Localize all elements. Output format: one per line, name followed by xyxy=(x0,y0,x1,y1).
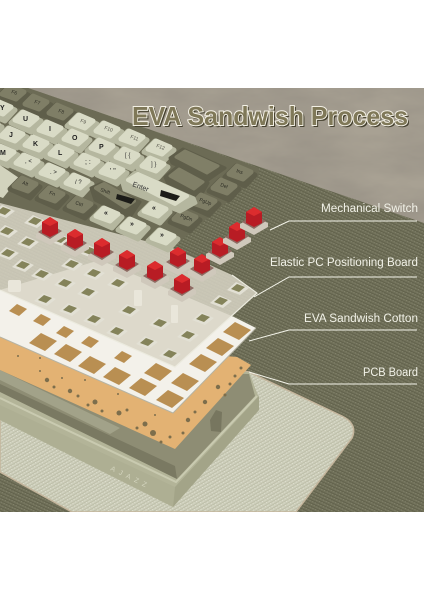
function row: F12 xyxy=(155,143,166,152)
case screw post xyxy=(210,410,222,432)
function row: F9 xyxy=(79,118,87,126)
bottom row: « xyxy=(152,205,156,212)
shift key: Shift xyxy=(99,187,111,197)
callout: elastic PC positioning board xyxy=(254,257,418,297)
function row: F11 xyxy=(129,134,139,143)
shift key xyxy=(91,183,140,217)
letter row Y to bracket: I xyxy=(49,126,51,133)
bottom row: Ctrl xyxy=(74,200,84,209)
brand mark: AJAZZ xyxy=(109,466,152,491)
callout: EVA sandwish cotton: EVA Sandwish Cotton xyxy=(304,313,418,325)
mechanical switches xyxy=(36,207,268,302)
letter row Y to bracket xyxy=(0,101,168,178)
letter row M to slash xyxy=(0,146,92,195)
letter row J to quote: ' " xyxy=(110,168,116,175)
function row: F8 xyxy=(57,108,65,116)
function row: F6 xyxy=(10,89,18,97)
stabilizers xyxy=(8,280,178,323)
letter row M to slash: , < xyxy=(25,159,32,165)
letter row Y to bracket: U xyxy=(23,116,28,123)
letter row Y to bracket: P xyxy=(99,144,104,151)
navigation cluster: PgUp xyxy=(198,197,212,207)
light cloth pad xyxy=(0,370,354,512)
elastic PC positioning board xyxy=(0,203,258,368)
enter key: Enter xyxy=(131,181,150,194)
PCB board xyxy=(0,335,251,449)
callout: EVA sandwish cotton xyxy=(249,313,418,341)
letter row Y to bracket: Y xyxy=(0,105,5,112)
desk mat xyxy=(0,88,424,512)
letter row J to quote: K xyxy=(33,141,38,148)
title: EVA Sandwish Process xyxy=(132,101,408,131)
title: EVA Sandwish Process xyxy=(134,102,410,132)
letter row J to quote: L xyxy=(58,150,63,157)
bottom row: Fn xyxy=(48,190,56,198)
callout: elastic PC positioning board: Elastic PC Positioning Board xyxy=(270,257,418,269)
function row: F10 xyxy=(103,125,114,134)
letter row Y to bracket: [ { xyxy=(125,153,130,159)
navigation cluster: PgDn xyxy=(179,213,193,223)
keycap layer xyxy=(0,86,259,250)
letter row J to quote xyxy=(0,118,127,184)
letter row M to slash: / ? xyxy=(75,180,82,186)
letter row J to quote: J xyxy=(9,132,13,139)
letter row Y to bracket: O xyxy=(72,135,78,142)
callout: PCB board xyxy=(249,367,418,384)
navigation cluster xyxy=(165,149,255,231)
photo scene xyxy=(0,86,424,512)
bottom row xyxy=(0,165,178,250)
bottom row: » xyxy=(130,221,134,228)
letter row J to quote: ; : xyxy=(85,159,91,166)
function row xyxy=(0,86,174,161)
navigation cluster: Del xyxy=(219,182,228,190)
callout: mechanical switch xyxy=(270,203,418,230)
letter row M to slash: . > xyxy=(50,170,57,176)
letter row M to slash: M xyxy=(0,150,6,157)
marble background xyxy=(28,88,424,223)
callout: mechanical switch: Mechanical Switch xyxy=(321,203,418,215)
callout: PCB board: PCB Board xyxy=(363,367,418,379)
keyboard case xyxy=(0,368,259,507)
function row: F7 xyxy=(33,99,41,107)
navigation cluster: Ins xyxy=(235,168,244,176)
EVA sandwish cotton layer xyxy=(0,260,256,413)
bottom row: « xyxy=(104,210,108,217)
letter row Y to bracket: ] } xyxy=(151,162,156,168)
bottom row: » xyxy=(160,232,164,239)
keycap tray shadow xyxy=(0,88,259,248)
enter key xyxy=(122,172,196,212)
bottom row: Alt xyxy=(21,180,29,188)
